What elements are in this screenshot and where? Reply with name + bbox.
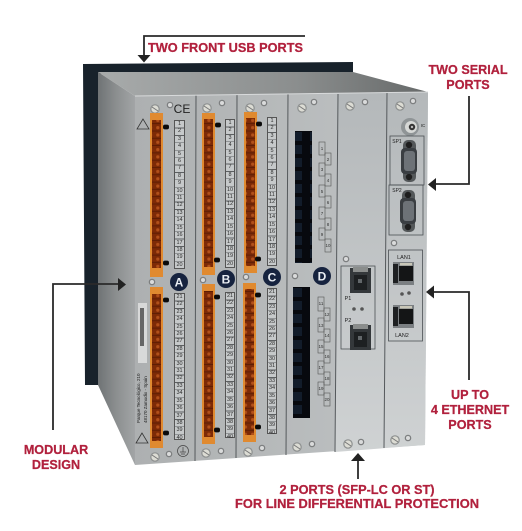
chassis top face: [98, 72, 428, 96]
module A numbers 1-20: 11: [177, 195, 182, 201]
module C numbers 21-40: 22: [269, 296, 275, 302]
module D number tags: 6: [327, 200, 330, 205]
module A numbers 1-20: 1: [178, 121, 181, 127]
module B numbers 1-20: 1: [228, 120, 232, 126]
module A numbers 1-20: 12: [176, 202, 183, 208]
module B numbers 21-40: 39: [227, 426, 233, 432]
module B numbers 21-40: 25: [227, 323, 233, 329]
black connector latches: [163, 122, 262, 435]
module A numbers 1-20: 4: [178, 143, 181, 149]
module C numbers 1-20: 7: [270, 162, 274, 168]
module D number tags: 3: [321, 167, 324, 172]
module B numbers 21-40: 34: [227, 389, 233, 395]
label: differential protection ports: [235, 483, 479, 511]
module C numbers 1-20: 17: [269, 236, 275, 242]
label: modular design: [24, 443, 88, 472]
module C numbers 1-20: 1: [270, 118, 274, 124]
module B numbers 1-20: 2: [228, 127, 232, 133]
module C numbers 21-40: 30: [269, 356, 275, 362]
module A numbers 1-20: 5: [178, 151, 181, 157]
orange terminal connectors: [150, 112, 257, 448]
SFP port panel: P1: [345, 296, 351, 302]
module B numbers 1-20: 15: [227, 224, 233, 230]
module B numbers 21-40: 35: [227, 397, 233, 403]
module A numbers 1-20: 8: [178, 173, 181, 179]
module C numbers 21-40: 32: [269, 370, 275, 376]
manufacturer address: 48170 Zamudio - Spain: [143, 376, 148, 423]
module A numbers 21-40: 37: [176, 412, 183, 418]
module C numbers 1-20: 19: [269, 251, 275, 257]
module letter badges: B: [222, 272, 231, 286]
module C numbers 21-40: 33: [269, 378, 275, 384]
module B numbers 21-40: 31: [227, 367, 233, 373]
module C numbers 1-20: 14: [269, 214, 275, 220]
arrow: modular design: [53, 278, 126, 430]
module C numbers 1-20: 9: [270, 177, 274, 183]
chassis rear frame: [83, 62, 353, 385]
module B numbers 1-20: 14: [227, 216, 233, 222]
ethernet port panel: [388, 250, 422, 341]
module A numbers 1-20: 20: [176, 262, 183, 268]
module B numbers 1-20: 20: [227, 261, 233, 267]
module C numbers 1-20: 15: [269, 222, 275, 228]
module A numbers 1-20: 3: [178, 136, 181, 142]
module C numbers 1-20: 13: [269, 207, 275, 213]
module B numbers 1-20: 17: [227, 238, 233, 244]
module D number tags: 14: [324, 333, 330, 338]
module A numbers 1-20: 18: [176, 247, 183, 253]
module D number tags: 17: [318, 365, 324, 370]
BNC connector: [401, 118, 426, 136]
serial port panel: [389, 136, 424, 235]
module A numbers 1-20: 10: [176, 188, 183, 194]
module A numbers 21-40: 36: [176, 405, 183, 411]
label: ethernet ports: PORTS: [448, 418, 492, 432]
module A numbers 21-40: 27: [176, 338, 183, 344]
module C numbers 1-20: 12: [269, 199, 275, 205]
module A numbers 21-40: [174, 293, 185, 440]
ground symbol: [178, 446, 188, 456]
module B numbers 21-40: 38: [227, 419, 233, 425]
module B numbers 1-20: 3: [228, 135, 232, 141]
module B numbers 21-40: 23: [227, 308, 233, 314]
module C numbers 1-20: 10: [269, 185, 275, 191]
module letter badges: C: [268, 270, 277, 284]
module B numbers 1-20: 13: [227, 209, 233, 215]
module A numbers 1-20: 17: [176, 240, 183, 246]
module A numbers 1-20: 2: [178, 128, 181, 134]
module A numbers 21-40: 31: [176, 368, 183, 374]
module A numbers 1-20: [174, 120, 185, 269]
module D terminal blocks: [293, 131, 312, 418]
module C numbers 21-40: 25: [269, 319, 275, 325]
module B numbers 1-20: 6: [228, 157, 232, 163]
label: ethernet ports: 4 ETHERNET: [431, 403, 509, 417]
module A numbers 1-20: 9: [178, 180, 181, 186]
CE mark: CE: [174, 102, 190, 116]
module D number tags: 13: [318, 323, 324, 328]
module B numbers 1-20: 12: [227, 201, 233, 207]
module A numbers 1-20: 16: [176, 232, 183, 238]
barcode label: [138, 303, 147, 363]
module B numbers 21-40: 24: [227, 315, 233, 321]
arrow: differential protection ports: [351, 453, 365, 479]
module A numbers 21-40: 33: [176, 383, 183, 389]
module A numbers 1-20: 6: [178, 158, 181, 164]
module C numbers 1-20: 4: [270, 140, 274, 146]
module B numbers 21-40: 21: [227, 293, 233, 299]
chassis side face: [98, 72, 135, 465]
label: two serial ports: PORTS: [446, 78, 490, 92]
module D number tags: [318, 142, 331, 406]
module D number tags: 7: [321, 211, 324, 216]
ethernet port panel: LAN2: [395, 333, 409, 339]
module B numbers 1-20: 16: [227, 231, 233, 237]
module A numbers 21-40: 23: [176, 309, 183, 315]
SFP port panel: P2: [345, 318, 351, 324]
arrow: ethernet ports: [426, 286, 469, 380]
module C numbers 1-20: 2: [270, 125, 274, 131]
SFP port panel: [341, 266, 375, 350]
module C numbers 21-40: 36: [269, 400, 275, 406]
module B numbers 1-20: 8: [228, 172, 232, 178]
module A numbers 21-40: 38: [176, 420, 183, 426]
front panel modules: [135, 92, 428, 465]
module letter badges: D: [318, 270, 327, 284]
module B numbers 1-20: 5: [228, 150, 232, 156]
module D number tags: 8: [327, 222, 330, 227]
module C numbers 21-40: 28: [269, 341, 275, 347]
module D number tags: 20: [324, 397, 330, 402]
module C numbers 21-40: 27: [269, 333, 275, 339]
module C numbers 1-20: [267, 117, 277, 266]
module D number tags: 9: [321, 232, 324, 237]
module C numbers 21-40: 24: [269, 311, 275, 317]
warning triangles: [136, 119, 149, 443]
module C numbers 21-40: 37: [269, 408, 275, 414]
module A numbers 21-40: 35: [176, 398, 183, 404]
heading: two front USB ports: TWO FRONT USB PORTS: [148, 41, 303, 55]
module B numbers 21-40: 40: [227, 434, 233, 440]
label: modular design: DESIGN: [32, 458, 80, 472]
module C numbers 21-40: 31: [269, 363, 275, 369]
module B numbers 21-40: 27: [227, 337, 233, 343]
label: differential protection ports: FOR LINE DIFFERENTIAL PROTECTION: [235, 497, 479, 511]
arrow: front USB ports: [138, 36, 305, 62]
label: two serial ports: TWO SERIAL: [428, 63, 508, 77]
module A numbers 1-20: 7: [178, 165, 181, 171]
module B numbers 1-20: 10: [227, 187, 233, 193]
module D number tags: 19: [318, 386, 324, 391]
module A numbers 21-40: 39: [176, 427, 183, 433]
module B numbers 21-40: [225, 292, 235, 438]
arrow: serial ports: [428, 96, 469, 191]
label: ethernet ports: [431, 388, 509, 432]
module B numbers 21-40: 32: [227, 374, 233, 380]
manufacturer address: [136, 373, 148, 423]
module A numbers 21-40: 29: [176, 353, 183, 359]
module A numbers 21-40: 30: [176, 361, 183, 367]
module B numbers 21-40: 36: [227, 404, 233, 410]
label: ethernet ports: UP TO: [451, 388, 489, 402]
module C numbers 1-20: 3: [270, 133, 274, 139]
module C numbers 1-20: 16: [269, 229, 275, 235]
module B numbers 1-20: 18: [227, 246, 233, 252]
module D number tags: 5: [321, 189, 324, 194]
module B numbers 21-40: 22: [227, 300, 233, 306]
module B numbers 21-40: 29: [227, 352, 233, 358]
label: two serial ports: [428, 63, 508, 92]
module A numbers 1-20: 15: [176, 225, 183, 231]
module C numbers 21-40: 38: [269, 415, 275, 421]
module A numbers 1-20: 13: [176, 210, 183, 216]
module C numbers 21-40: 21: [269, 289, 275, 295]
ethernet port panel: LAN1: [397, 255, 411, 261]
module C numbers 1-20: 6: [270, 155, 274, 161]
module B numbers 1-20: 11: [227, 194, 233, 200]
module B numbers 21-40: 26: [227, 330, 233, 336]
module A numbers 21-40: 26: [176, 331, 183, 337]
module B numbers 1-20: 19: [227, 253, 233, 259]
module A numbers 21-40: 25: [176, 324, 183, 330]
module D number tags: 11: [319, 301, 324, 306]
module letter badges: [170, 267, 331, 291]
module B numbers 21-40: 33: [227, 382, 233, 388]
module C numbers 21-40: 34: [269, 385, 275, 391]
module A numbers 1-20: 14: [176, 217, 183, 223]
module A numbers 21-40: 28: [176, 346, 183, 352]
module B numbers 21-40: 30: [227, 360, 233, 366]
module D number tags: 12: [324, 312, 330, 317]
module B numbers 1-20: 9: [228, 179, 232, 185]
module A numbers 21-40: 21: [176, 294, 183, 300]
label: differential protection ports: 2 PORTS (SFP-LC OR ST): [280, 483, 434, 497]
module D number tags: 18: [324, 376, 330, 381]
module C numbers 21-40: 29: [269, 348, 275, 354]
module B numbers 21-40: 37: [227, 412, 233, 418]
serial port panel: SP1: [392, 139, 402, 145]
manufacturer address: Parque Tecnológico, 210: [136, 373, 141, 423]
module C numbers 21-40: 35: [269, 393, 275, 399]
module B numbers 1-20: [225, 119, 235, 268]
module B numbers 1-20: 4: [228, 142, 232, 148]
serial port panel: SP2: [392, 188, 402, 194]
BNC connector: IC: [421, 123, 426, 128]
module C numbers 21-40: 26: [269, 326, 275, 332]
label: modular design: MODULAR: [24, 443, 88, 457]
module D number tags: 2: [327, 157, 330, 162]
module D number tags: 10: [325, 243, 331, 248]
module C numbers 1-20: 5: [270, 148, 274, 154]
module A numbers 21-40: 22: [176, 301, 183, 307]
module letter badges: A: [175, 276, 184, 290]
module C numbers 21-40: [267, 288, 277, 434]
module D number tags: 1: [321, 146, 324, 151]
module D number tags: 4: [327, 178, 330, 183]
module B numbers 1-20: 7: [228, 164, 232, 170]
module A numbers 21-40: 32: [176, 375, 183, 381]
module C numbers 1-20: 20: [269, 259, 275, 265]
panel screws: [149, 98, 416, 462]
module C numbers 1-20: 11: [269, 192, 275, 198]
module D number tags: 16: [324, 354, 330, 359]
module C numbers 21-40: 40: [269, 430, 275, 436]
module A numbers 21-40: 34: [176, 390, 183, 396]
module C numbers 1-20: 18: [269, 244, 275, 250]
module C numbers 21-40: 23: [269, 304, 275, 310]
module C numbers 1-20: 8: [270, 170, 274, 176]
module B numbers 21-40: 28: [227, 345, 233, 351]
module A numbers 21-40: 24: [176, 316, 183, 322]
module C numbers 21-40: 39: [269, 422, 275, 428]
module A numbers 21-40: 40: [176, 435, 183, 441]
module A numbers 1-20: 19: [176, 254, 183, 260]
module D number tags: 15: [318, 344, 324, 349]
